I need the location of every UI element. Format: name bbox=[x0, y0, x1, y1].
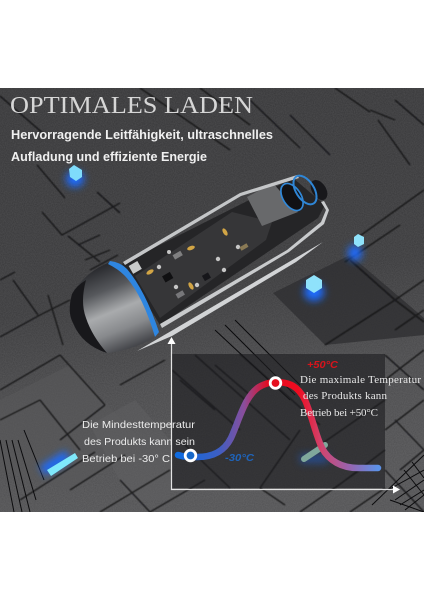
temperature curve bbox=[178, 382, 378, 468]
x axis arrow bbox=[171, 486, 400, 494]
icon: glowing cube centre right bbox=[304, 275, 324, 301]
subtitle: Hervorragende Leitfähigkeit, ultraschnelles bbox=[11, 127, 273, 142]
text block: maximum temperature: Die maximale Temperatur bbox=[300, 374, 421, 386]
marker: minimum bbox=[185, 450, 196, 461]
subtitle bbox=[11, 127, 273, 164]
chart panel bbox=[172, 354, 385, 488]
cap front face bbox=[70, 280, 107, 353]
blue cap ring bbox=[108, 261, 159, 337]
icon: glowing cube top left bbox=[66, 165, 84, 187]
subtitle: Aufladung und effiziente Energie bbox=[11, 149, 207, 164]
infographic canvas bbox=[0, 88, 424, 512]
marker: maximum bbox=[270, 378, 281, 388]
circuit components bbox=[129, 228, 248, 299]
text block: maximum temperature: des Produkts kann bbox=[303, 390, 388, 402]
chart glow bar bbox=[300, 445, 328, 463]
text block: minimum temperature: Die Mindesttemperatur bbox=[82, 419, 196, 431]
icon: glowing bar left bbox=[40, 451, 78, 476]
rear tip bbox=[307, 177, 331, 203]
text block: maximum temperature: Betrieb bei +50°C bbox=[300, 407, 378, 419]
text block: minimum temperature bbox=[82, 419, 196, 465]
label: -30°C: -30°C bbox=[225, 453, 255, 464]
y axis arrow bbox=[168, 337, 176, 490]
text block: minimum temperature: Betrieb bei -30° C bbox=[82, 453, 170, 465]
text block: minimum temperature: des Produkts kann sein bbox=[84, 436, 195, 448]
lower casing rail bbox=[160, 201, 329, 328]
background: dark circuit board bbox=[0, 88, 424, 512]
circuit board bbox=[135, 212, 272, 318]
lower outer shell bbox=[137, 242, 323, 351]
title: OPTIMALES LADEN bbox=[10, 93, 253, 119]
inner circuit cavity bbox=[122, 178, 325, 325]
label: +50°C: +50°C bbox=[307, 360, 339, 371]
aluminium cap bbox=[72, 262, 158, 353]
text block: maximum temperature bbox=[300, 374, 421, 419]
icon: glowing cube right edge bbox=[348, 234, 364, 261]
product: opened charger cross-section bbox=[70, 172, 331, 353]
upper casing rail bbox=[123, 175, 299, 265]
inner grey moulding bbox=[247, 183, 298, 226]
blue end rings bbox=[276, 172, 321, 214]
